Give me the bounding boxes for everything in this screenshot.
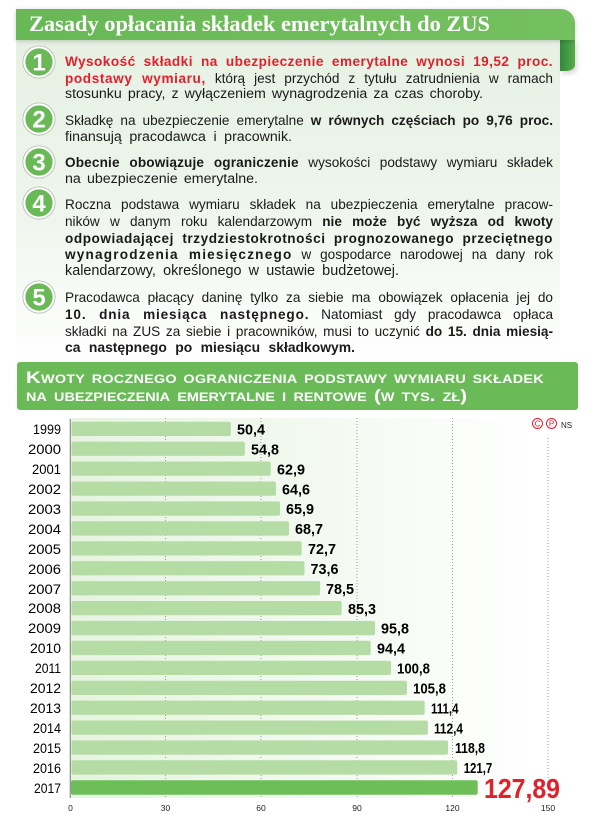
row: 2016: [33, 760, 492, 777]
text block: rule 2: finansują pracodawca i pracownik.: [65, 129, 292, 145]
icon: number 2: [22, 102, 56, 136]
row: 2004: [28, 521, 323, 538]
row: 2012: [30, 681, 446, 698]
icon: number 1: 1: [32, 50, 46, 76]
heading: chart title: [17, 362, 578, 410]
row: 2005: 72,7: [308, 542, 336, 558]
text block: rule 5: 10. dnia miesiąca następnego. Natomiast gdy pracodawca opłaca: [65, 307, 553, 322]
row: 2016: 121,7: [464, 761, 492, 777]
row: 2014: 112,4: [434, 721, 463, 737]
row: 2005: [28, 541, 336, 558]
icon: number 1: [22, 46, 56, 78]
copyright marks: P: [549, 420, 554, 428]
row: 2012: 2012: [30, 681, 61, 696]
row: 2009: 2009: [28, 621, 61, 636]
row: 2008: [28, 601, 376, 618]
axis labels: 90: [352, 803, 362, 813]
row: 2013: 2013: [30, 701, 61, 716]
row: 2006: 2006: [28, 562, 61, 577]
text block: rule 4: odpowiadającej trzydziestokrotności prognozowanego przeciętnego: [65, 231, 553, 246]
icon: ribbon curl: [560, 40, 575, 71]
row: 2011: 2011: [35, 661, 61, 676]
axis labels: [68, 803, 555, 813]
row: 1999: [33, 422, 265, 438]
icon: number 3: [22, 146, 56, 178]
text block: rule 5: [65, 290, 554, 355]
row: 2016: 2016: [33, 761, 61, 776]
text block: rule 4: wynagrodzenia miesięcznego w gospodarce narodowej na dany rok: [65, 247, 553, 262]
icon: number 5: 5: [32, 284, 46, 312]
row: 2014: [33, 720, 463, 737]
row: 2017: [34, 773, 560, 804]
row: 2006: 73,6: [310, 562, 338, 578]
copyright marks: [532, 418, 572, 430]
row: 1999: 50,4: [237, 422, 265, 438]
row: 2000: [28, 442, 279, 458]
row: 2011: 100,8: [397, 662, 430, 678]
text block: rule 4: kalendarzowy, określonego w ustawie budżetowej.: [65, 263, 399, 279]
row: 2007: 78,5: [326, 582, 354, 598]
row: 2017: 2017: [34, 781, 61, 796]
row: 2015: [33, 740, 485, 757]
row: 2001: 62,9: [277, 462, 305, 478]
text block: rule 4: ników w danym roku kalendarzowym nie może być wyższa od kwoty: [65, 214, 553, 229]
row: 2002: [28, 482, 310, 498]
row: 2005: 2005: [28, 542, 61, 557]
copyright marks: C: [535, 420, 541, 428]
row: 2004: 2004: [28, 522, 62, 537]
axis labels: 0: [68, 803, 73, 813]
heading: main title: [16, 9, 575, 40]
icon: number 2: 2: [32, 106, 46, 134]
icon: number 3: 3: [32, 150, 46, 176]
row: 2013: [30, 701, 458, 717]
text block: rule 4: [65, 197, 553, 279]
row: 2003: 65,9: [286, 502, 314, 518]
row: 2008: 85,3: [348, 602, 376, 618]
text block: rule 1: Wysokość składki na ubezpieczenie emerytalne wynosi 19,52 proc.: [65, 54, 553, 69]
text block: rule 3: [65, 155, 553, 187]
heading: chart title: na ubezpieczenia emerytalne i rentowe (w tys. zł): [26, 386, 467, 405]
text block: rule 5: Pracodawca płacący daninę tylko za siebie ma obowiązek opłacenia jej do: [65, 290, 553, 305]
axis labels: 30: [161, 803, 170, 813]
row: 2003: 2003: [28, 502, 61, 517]
row: 1999: 1999: [33, 422, 61, 437]
row: 2002: 2002: [28, 482, 61, 497]
text block: rule 2: Składkę na ubezpieczenie emerytalne w równych częściach po 9,76 proc.: [65, 113, 553, 128]
row: 2010: 94,4: [377, 642, 405, 658]
copyright marks: NS: [561, 421, 572, 430]
row: 2001: [32, 462, 305, 478]
heading: main title: Zasady opłacania składek emerytalnych do ZUS: [29, 11, 490, 36]
icon: number 5: [22, 280, 56, 314]
row: 2013: 111,4: [431, 701, 458, 717]
row: 2015: 2015: [33, 741, 61, 756]
row: 2007: [28, 581, 354, 598]
row: 2001: 2001: [32, 462, 61, 477]
text block: rule 1: stosunku pracy, z wyłączeniem wynagrodzenia za czas choroby.: [65, 86, 483, 102]
row: 2000: 54,8: [251, 442, 279, 458]
text block: rule 4: Roczna podstawa wymiaru składek na ubezpieczenia emerytalne pracow-: [65, 197, 553, 212]
row: 2002: 64,6: [282, 482, 310, 498]
icon: number 4: 4: [32, 190, 46, 218]
axis labels: 60: [256, 803, 266, 813]
icon: number 4: [22, 186, 56, 220]
text block: rule 2: [65, 113, 553, 145]
row: 2009: 95,8: [381, 622, 409, 638]
text block: rule 5: ca następnego po miesiącu składkowym.: [65, 339, 355, 355]
axis labels: 120: [445, 803, 460, 813]
row: 2010: 2010: [30, 641, 61, 656]
heading: chart title: Kwoty rocznego ograniczenia podstawy wymiaru składek: [26, 368, 544, 387]
text block: rule 3: Obecnie obowiązuje ograniczenie wysokości podstawy wymiaru składek: [65, 155, 553, 170]
row: 2014: 2014: [33, 721, 61, 736]
row: 2010: [30, 641, 405, 658]
row: 2003: [28, 501, 314, 518]
text block: rule 3: na ubezpieczenie emerytalne.: [65, 171, 258, 187]
row: 2004: 68,7: [295, 522, 323, 538]
row: 2006: [28, 561, 338, 578]
panel: rules background: [16, 40, 560, 355]
row: 2011: [35, 661, 430, 678]
text block: rule 1: podstawy wymiaru, którą jest przychód z tytułu zatrudnienia w ramach: [65, 71, 553, 86]
axis labels: 150: [541, 803, 555, 813]
row: 2015: 118,8: [455, 741, 485, 757]
row: 2007: 2007: [28, 582, 61, 597]
row: 2009: [28, 621, 409, 638]
text block: rule 1: [65, 54, 553, 102]
text block: rule 5: składki na ZUS za siebie i pracowników, musi to uczynić do 15. dnia miesią-: [65, 324, 553, 339]
row: 2000: 2000: [28, 442, 61, 457]
row: 2012: 105,8: [413, 682, 446, 698]
row: 2017: 127,89: [484, 773, 560, 804]
row: 2008: 2008: [28, 601, 61, 616]
